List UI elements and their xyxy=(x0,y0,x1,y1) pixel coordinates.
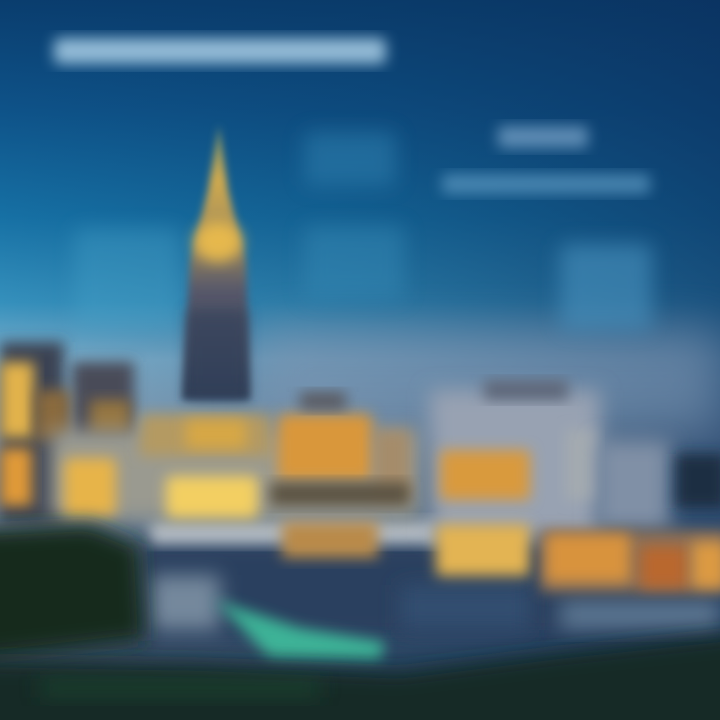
pool: turquoise water xyxy=(215,600,385,660)
text block: upper right caption xyxy=(442,174,650,194)
heading: upper right label xyxy=(498,126,588,148)
lower facade and terrace xyxy=(140,520,720,640)
text block: right xyxy=(560,244,652,330)
trees: left dark foliage xyxy=(0,524,145,660)
title xyxy=(54,38,386,64)
left dark buildings xyxy=(0,342,134,522)
tower spire xyxy=(182,125,250,400)
text block: middle xyxy=(304,226,404,300)
text block: left xyxy=(74,228,180,330)
text block: upper middle xyxy=(304,132,396,186)
foreground: dark green hedge xyxy=(0,632,720,720)
right building xyxy=(430,380,720,576)
central building base xyxy=(50,392,420,558)
far right lit wing xyxy=(540,530,720,592)
